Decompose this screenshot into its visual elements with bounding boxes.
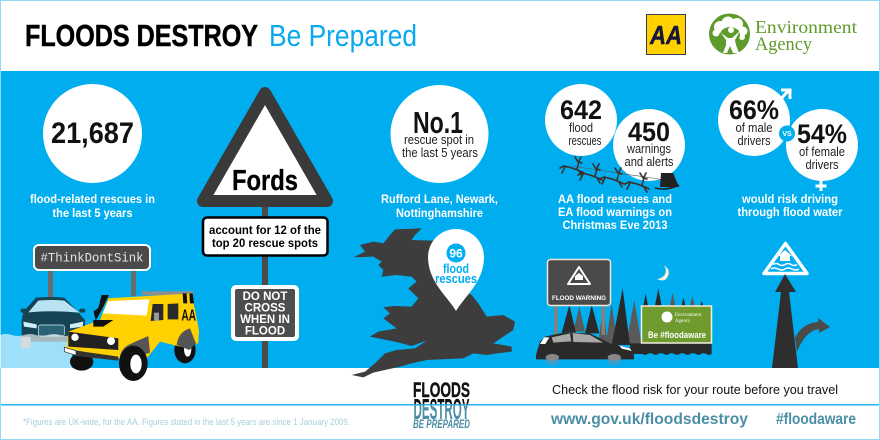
icon: male arrow — [779, 90, 790, 101]
panel: male vs female drivers — [718, 84, 858, 219]
sign: Be #floodaware: Environment — [675, 313, 702, 318]
sign: #ThinkDontSink: #ThinkDontSink — [40, 252, 144, 266]
logo: Environment Agency: Environment — [755, 17, 857, 37]
warning triangle: Fords — [203, 93, 327, 201]
stat circle: 66%: of male — [736, 121, 773, 135]
map pin: 96 flood rescues — [428, 229, 484, 311]
stat circle: 54%: drivers — [806, 158, 838, 172]
icon: flood warning triangle — [764, 244, 807, 274]
map pin: 96 flood rescues: flood — [443, 262, 469, 276]
icon: female cross — [816, 180, 826, 191]
sign post — [262, 200, 268, 368]
footer logo: Floods Destroy Be Prepared — [413, 382, 470, 428]
caption: would risk driving: through flood water — [738, 205, 843, 219]
caption: Rufford Lane: Rufford Lane, Newark, — [381, 192, 498, 206]
map: UK silhouette — [352, 228, 515, 377]
panel: fords sign — [203, 93, 328, 368]
stat circle: 450 — [613, 109, 685, 181]
footer logo: Floods Destroy Be Prepared: FLOODS — [413, 379, 470, 402]
call to action: Check the flood risk for your route before you travel — [552, 382, 838, 397]
stat circle: No.1: the last 5 years — [402, 146, 478, 160]
caption: flood-related rescues: the last 5 years — [52, 206, 133, 220]
stat circle: 54%: 54% — [797, 119, 847, 149]
stat circle: 642: 642 — [560, 95, 602, 125]
plaque: account for 12: top 20 rescue spots — [212, 236, 318, 250]
icon: AA Land Rover: AA — [181, 308, 196, 325]
sign: Be #floodaware: Be #floodaware — [648, 330, 706, 341]
scene: night road — [536, 260, 712, 366]
panel: total rescues — [30, 84, 155, 220]
warning triangle: Fords: Fords — [232, 165, 298, 197]
sign: flood warning — [548, 260, 610, 335]
icon: AA Land Rover — [64, 291, 199, 381]
caption: flood-related rescues: flood-related rescues in — [30, 192, 155, 206]
map pin: 96 flood rescues: 96 — [449, 246, 463, 260]
water — [0, 334, 72, 368]
arrow: road forks — [772, 274, 830, 368]
title: FLOODS DESTROY — [25, 19, 258, 53]
logo: Environment Agency: Agency — [755, 34, 812, 55]
hashtag: #floodaware — [776, 411, 856, 428]
stat circle: 21,687: 21,687 — [51, 117, 134, 150]
stat circle: 642 — [545, 84, 617, 156]
stat circle: 450: warnings — [626, 142, 671, 156]
stat circle: 642: flood — [569, 121, 593, 135]
sign: do not cross — [231, 285, 299, 341]
logo: AA — [646, 14, 686, 54]
icon: reindeer and sleigh — [560, 157, 679, 192]
stat circle: No.1: rescue spot in — [404, 133, 474, 147]
sign: Be #floodaware — [642, 306, 712, 343]
stat circle: 66%: drivers — [738, 134, 770, 148]
logo: Environment Agency — [709, 14, 857, 55]
caption: AA flood rescues: AA flood rescues and — [558, 192, 672, 206]
sign: do not cross: DO NOT — [243, 291, 287, 303]
footer logo: Floods Destroy Be Prepared: BE PREPARED — [413, 419, 470, 431]
stat circle: 66%: 66% — [729, 95, 779, 125]
infographic: DESTROY — [414, 394, 470, 426]
icon: blue car — [21, 297, 85, 348]
map pin: 96 flood rescues: rescues — [435, 272, 477, 286]
caption: Rufford Lane: Nottinghamshire — [396, 206, 483, 220]
plaque: account for 12: account for 12 of the — [209, 223, 321, 237]
sign: do not cross: CROSS — [245, 302, 286, 314]
sign: Be #floodaware: Agency — [675, 319, 691, 324]
caption: AA flood rescues: Christmas Eve 2013 — [562, 218, 668, 232]
stat circle: 450: 450 — [628, 117, 670, 147]
sign: flood warning: FLOOD WARNING — [552, 295, 606, 302]
tree line — [562, 288, 712, 355]
logo: AA: AA — [649, 20, 682, 50]
sign: #ThinkDontSink — [34, 245, 150, 298]
stat circle: No.1 — [390, 85, 488, 183]
caption: AA flood rescues: EA flood warnings on — [558, 205, 672, 219]
icon: black car — [536, 333, 634, 366]
badge: vs: VS — [782, 131, 792, 138]
stat circle: 66% — [718, 84, 790, 156]
plaque: account for 12 — [203, 218, 328, 256]
moon — [657, 265, 669, 280]
stat circle: No.1: No.1 — [413, 105, 463, 140]
stat circle: 450: and alerts — [624, 155, 674, 169]
stat circle: 54%: of female — [799, 145, 845, 159]
panel: Christmas Eve — [545, 84, 685, 232]
link: website: www.gov.uk/floodsdestroy — [550, 411, 748, 428]
stat circle: 54% — [786, 109, 858, 181]
stat circle: 642: rescues — [568, 134, 602, 148]
infographic: DESTROY — [414, 394, 470, 426]
sign: do not cross: FLOOD — [245, 326, 285, 338]
caption: would risk driving: would risk driving — [741, 192, 838, 206]
sign: do not cross: WHEN IN — [240, 314, 290, 326]
panel: No.1 rescue spot — [381, 85, 498, 220]
footnote: *Figures are UK-wide, for the AA. Figures stated in the last 5 years are since 1 January 2009. — [23, 417, 350, 428]
title: Be Prepared — [269, 19, 417, 53]
